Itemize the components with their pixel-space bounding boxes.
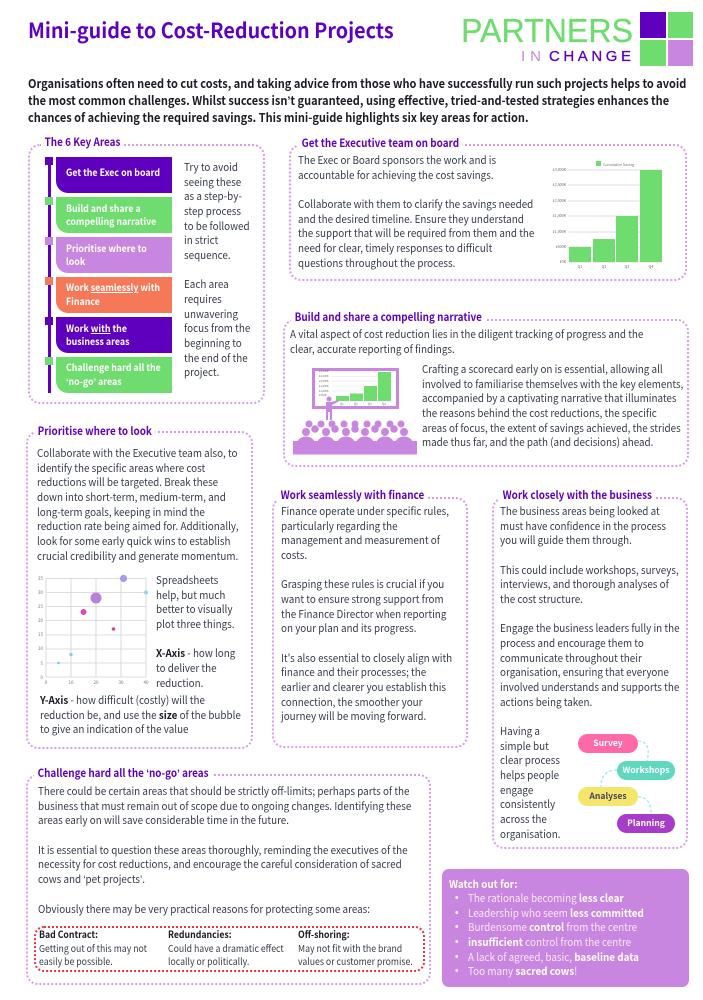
bubble chart: 20 xyxy=(38,618,43,624)
title: Mini-guide to Cost-Reduction Projects xyxy=(28,14,394,44)
bubble chart: 10 xyxy=(68,680,74,686)
text: business: process and encourage them to xyxy=(500,635,644,651)
step: challenge xyxy=(56,357,172,393)
bubble chart: 10 xyxy=(38,646,43,652)
logo: Partners in Change: PARTNERS xyxy=(461,12,633,49)
text: narrative body: involved to familiarise themselves with the key elements, xyxy=(422,376,683,392)
icon: presentation to audience: £2,500K xyxy=(319,374,329,378)
bar chart: cumulative saving: Cumulative Saving xyxy=(603,163,634,168)
marker 1 xyxy=(45,157,53,165)
text: narrative intro: clear, accurate reporting of findings. xyxy=(290,341,455,357)
text: executive team xyxy=(298,152,534,271)
text: process note: across the xyxy=(500,811,547,827)
heading: prioritise: Prioritise where to look xyxy=(38,423,152,439)
text: key areas note: unwavering xyxy=(184,306,238,322)
reason: redundancies: Could have a dramatic effect xyxy=(168,941,284,955)
step: challenge: ‘no-go’ areas xyxy=(66,374,122,388)
text: prioritise body: crucial credibility and generate momentum. xyxy=(37,548,238,564)
list: warnings: Leadership who seem less committed xyxy=(468,905,644,921)
text: business: the cost structure. xyxy=(500,591,583,607)
intro text xyxy=(28,74,686,126)
text: finance: It's also essential to closely align with xyxy=(281,650,452,666)
step: get the exec on board: Get the Exec on board xyxy=(66,165,160,179)
marker 6 xyxy=(45,357,53,365)
text: no-go body: necessity for cost reductions, and encourage the careful consideration of sacred xyxy=(38,856,402,872)
text: process note: organisation. xyxy=(500,826,561,842)
panel: watch out for xyxy=(442,869,689,987)
text: business: must have confidence in the process xyxy=(500,518,666,534)
intro text: chances of achieving the required savings. This mini-guide highlights six key areas for action. xyxy=(28,108,529,126)
reason: bad contract: easily be possible. xyxy=(39,954,113,968)
text: y-axis note: to give an indication of the value xyxy=(40,721,189,737)
text: narrative body: accompanied by a captivating narrative that illuminates xyxy=(422,390,677,406)
text: key areas note: seeing these xyxy=(184,174,241,190)
callout: practical reasons xyxy=(34,926,425,972)
heading: finance: Work seamlessly with finance xyxy=(281,487,424,503)
bar chart: cumulative saving xyxy=(553,161,662,270)
text: prioritise body: reduction rate being aimed for. Additionally, xyxy=(37,518,238,534)
bubble chart: 30 xyxy=(38,590,43,596)
text: process note: simple but xyxy=(500,738,549,754)
text: business: This could include workshops, surveys, xyxy=(500,562,679,578)
heading: the 6 key areas: The 6 Key Areas xyxy=(45,134,120,150)
text: business: Engage the business leaders fully in the xyxy=(500,620,680,636)
bubble chart: 15 xyxy=(38,632,43,638)
logo: Partners in Change: IN xyxy=(521,48,541,65)
step: prioritise xyxy=(56,237,172,273)
bubble chart: 5 xyxy=(40,661,44,667)
icon: presentation to audience: £500K xyxy=(319,393,327,397)
text: business: actions being taken. xyxy=(500,694,592,710)
bar chart: cumulative saving: £1,000K xyxy=(553,230,567,235)
step: analyses: Analyses xyxy=(589,790,627,802)
reason: redundancies xyxy=(168,927,284,968)
panel: compelling narrative xyxy=(283,319,689,467)
text: finance: journey will be moving forward. xyxy=(281,708,426,724)
step: get the exec on board xyxy=(56,157,172,193)
text: narrative body: the reasons behind the cost reductions, the specific xyxy=(422,405,657,421)
text: prioritise body: Collaborate with the Executive team also, to xyxy=(37,445,238,461)
text: process note: Having a xyxy=(500,723,540,739)
text: business xyxy=(500,503,680,710)
icon: presentation to audience: £1,000K xyxy=(319,389,329,393)
heading: executive team: Get the Executive team on board xyxy=(302,135,459,151)
text: narrative intro xyxy=(290,326,643,357)
text: process note: helps people xyxy=(500,767,559,783)
heading: business: Work closely with the business xyxy=(503,487,652,503)
text: prioritise body: down into short-term, medium-term, and xyxy=(37,489,226,505)
step: build narrative: Build and share a xyxy=(66,201,141,215)
bubble chart: 35 xyxy=(38,576,43,582)
reason: off-shoring xyxy=(298,927,413,968)
reason: off-shoring: values or customer promise. xyxy=(298,954,413,968)
logo: Partners in Change: CHANGE xyxy=(549,48,631,65)
text: narrative intro: A vital aspect of cost reduction lies in the diligent tracking of progress and the xyxy=(290,326,643,342)
heading: no-go areas: Challenge hard all the ‘no-go’ areas xyxy=(38,765,209,781)
text: executive team: accountable for achieving the cost savings. xyxy=(298,167,494,183)
text: executive team: and the desired timeline. Ensure they understand xyxy=(298,211,524,227)
bar chart: cumulative saving: £3,000K xyxy=(553,168,567,173)
text: finance: on your plan and its progress. xyxy=(281,620,416,636)
bar chart: cumulative saving: £1,500K xyxy=(553,214,567,219)
step: planning xyxy=(617,814,675,833)
step: survey xyxy=(578,734,638,753)
marker 5 xyxy=(45,317,53,325)
text: key areas note: the end of the xyxy=(184,350,248,366)
step: business: Work with the xyxy=(66,321,127,335)
heading: watch out for: Watch out for: xyxy=(449,876,517,892)
text: business: communicate throughout their xyxy=(500,650,642,666)
icon: presentation to audience: £1,500K xyxy=(319,384,329,388)
text: process note: clear process xyxy=(500,752,560,768)
step: prioritise: Prioritise where to xyxy=(66,241,147,255)
step: challenge: Challenge hard all the xyxy=(66,360,161,374)
icon: presentation to audience: Q1 xyxy=(340,402,344,406)
step: build narrative: compelling narrative xyxy=(66,214,156,228)
icon: presentation to audience: £2,000K xyxy=(319,379,329,383)
text: process note xyxy=(500,723,561,842)
text: business: involved understands and supports the xyxy=(500,679,679,695)
reason: off-shoring: May not fit with the brand xyxy=(298,941,402,955)
text: finance: finance and their processes; the xyxy=(281,664,426,680)
marker 3 xyxy=(45,237,53,245)
step: survey: Survey xyxy=(593,737,623,749)
text: process note: engage xyxy=(500,782,533,798)
intro text: the most common challenges. Whilst success isn’t guaranteed, using effective, tried-and-tested strategies enhances the xyxy=(28,91,669,109)
step: finance xyxy=(56,277,172,313)
text: key areas note xyxy=(184,159,250,380)
reason: bad contract: Bad Contract: xyxy=(39,927,98,941)
logo: Partners in Change xyxy=(461,12,693,66)
text: key areas note: step process xyxy=(184,203,241,219)
text: narrative body xyxy=(422,361,683,450)
icon: presentation to audience: Q3 xyxy=(368,402,372,406)
marker 4 xyxy=(45,277,53,285)
step: finance: Finance xyxy=(66,294,100,308)
reason: redundancies: Redundancies: xyxy=(168,927,232,941)
text: process note: consistently xyxy=(500,796,555,812)
text: no-go body: cows and ‘pet projects’. xyxy=(38,871,145,887)
bar chart: cumulative saving: £0K xyxy=(560,260,567,265)
text: no-go body: It is essential to question these areas thoroughly, reminding the executives of the xyxy=(38,842,408,858)
panel: finance xyxy=(272,497,468,748)
icon: presentation to audience: Q4 xyxy=(382,402,386,406)
reason: redundancies: locally or politically. xyxy=(168,954,249,968)
reason: bad contract xyxy=(39,927,147,968)
bullets: • xyxy=(455,951,459,963)
step: prioritise: look xyxy=(66,254,85,268)
list: warnings: Too many sacred cows! xyxy=(468,963,577,979)
step: workshops xyxy=(617,761,675,780)
text: finance xyxy=(280,503,452,724)
text: no-go body: Obviously there may be very practical reasons for protecting some areas: xyxy=(38,901,370,917)
text: key areas note: beginning to xyxy=(184,335,242,351)
text: y-axis note: Y-Axis - how difficult (costly) will the xyxy=(40,692,205,708)
text: chart note: to deliver the xyxy=(156,660,217,676)
text: key areas note: in strict xyxy=(184,232,218,248)
icon: presentation to audience: £3,000K xyxy=(319,369,329,373)
step: build narrative xyxy=(56,197,172,233)
text: key areas note: requires xyxy=(184,291,222,307)
text: executive team: questions throughout the process. xyxy=(298,255,455,271)
text: y-axis note xyxy=(40,692,241,737)
text: business: interviews, and thorough analyses of xyxy=(500,576,669,592)
step: business: business areas xyxy=(66,334,129,348)
text: executive team: The Exec or Board sponsors the work and is xyxy=(298,152,496,168)
text: prioritise body: long-term goals, keeping in mind the xyxy=(37,504,205,520)
marker 2 xyxy=(45,197,53,205)
bullets: • xyxy=(455,907,459,919)
text: y-axis note: reduction be, and use the size of the bubble xyxy=(40,707,241,723)
text: key areas note: Try to avoid xyxy=(184,159,238,175)
text: key areas note: project. xyxy=(184,364,219,380)
icon: presentation to audience xyxy=(293,368,417,454)
panel: no-go areas xyxy=(26,774,431,985)
panel: prioritise xyxy=(26,431,253,749)
bullets: • xyxy=(455,892,459,904)
text: prioritise body: identify the specific areas where cost xyxy=(37,460,205,476)
list: warnings: Burdensome control from the centre xyxy=(468,919,637,935)
bar chart: cumulative saving: Q3 xyxy=(625,265,629,270)
text: key areas note: Each area xyxy=(184,276,229,292)
list: warnings: insufficient control from the centre xyxy=(468,934,631,950)
text: prioritise body: reductions will be targeted. Break these xyxy=(37,474,218,490)
icon: presentation to audience: Q2 xyxy=(354,402,358,406)
panel: executive team xyxy=(289,144,687,281)
text: prioritise body: look for some early quick wins to establish xyxy=(37,533,230,549)
text: narrative body: areas of focus, the extent of savings achieved, the strides xyxy=(422,420,681,436)
step: planning: Planning xyxy=(627,817,665,829)
bubble chart: 40 xyxy=(144,680,149,686)
bubble chart: 30 xyxy=(118,680,124,686)
bullets: • xyxy=(455,936,459,948)
text: key areas note: focus from the xyxy=(184,320,250,336)
text: executive team: Collaborate with them to clarify the savings needed xyxy=(298,196,533,212)
bar chart: cumulative saving: £500K xyxy=(556,245,567,250)
process connectors xyxy=(600,740,652,812)
bullets xyxy=(455,892,459,977)
text: finance: Finance operate under specific rules, xyxy=(281,503,449,519)
bubble chart xyxy=(38,574,149,686)
text: no-go body: areas early on will save considerable time in the future. xyxy=(38,812,289,828)
text: finance: want to ensure strong support from xyxy=(281,591,444,607)
text: finance: management and measurement of xyxy=(281,532,440,548)
text: finance: earlier and clearer you establish this xyxy=(281,679,446,695)
list: warnings: A lack of agreed, basic, baseline data xyxy=(468,949,639,965)
list: warnings xyxy=(468,890,644,979)
bubble chart: 0 xyxy=(45,680,48,686)
bar chart: cumulative saving: £2,000K xyxy=(553,199,567,204)
text: narrative body: Crafting a scorecard early on is essential, allowing all xyxy=(422,361,663,377)
reason: off-shoring: Off-shoring: xyxy=(298,927,350,941)
text: finance: particularly regarding the xyxy=(281,518,398,534)
bullets: • xyxy=(455,965,459,977)
text: business: The business areas being looked at xyxy=(500,503,660,519)
text: no-go body: There could be certain areas that should be strictly off-limits; perhaps parts of the xyxy=(38,783,410,799)
text: chart note: X-Axis - how long xyxy=(156,645,235,661)
text: finance: Grasping these rules is crucial if you xyxy=(281,576,444,592)
text: executive team: the support that will be required from them and the xyxy=(298,225,534,241)
bubble chart: 0 xyxy=(40,675,44,681)
text: chart note: reduction. xyxy=(156,675,203,691)
step: workshops: Workshops xyxy=(622,764,670,776)
panel: the 6 key areas xyxy=(28,144,265,404)
text: business: organisation, ensuring that everyone xyxy=(500,664,669,680)
list: warnings: The rationale becoming less clear xyxy=(468,890,624,906)
text: no-go body xyxy=(38,783,411,917)
text: chart note: help, but much xyxy=(156,587,225,603)
text: key areas note: as a step-by- xyxy=(184,188,242,204)
bubble chart: 20 xyxy=(94,680,99,686)
text: narrative body: made thus far, and the path (and decisions) ahead. xyxy=(422,434,653,450)
text: chart note: better to visually xyxy=(156,601,232,617)
bubble chart: 25 xyxy=(38,604,43,610)
bullets: • xyxy=(455,921,459,933)
text: key areas note: to be followed xyxy=(184,218,250,234)
text: prioritise body xyxy=(37,445,238,564)
text: finance: costs. xyxy=(281,547,307,563)
reason: bad contract: Getting out of this may not xyxy=(39,941,147,955)
text: chart note: plot three things. xyxy=(156,616,235,632)
bar chart: cumulative saving: £2,500K xyxy=(553,183,567,188)
bar chart: cumulative saving: Q4 xyxy=(649,265,653,270)
text: executive team: need for clear, timely responses to difficult xyxy=(298,240,492,256)
step: business xyxy=(56,317,172,353)
text: finance: connection, the smoother your xyxy=(281,694,422,710)
timeline line xyxy=(48,157,50,393)
text: no-go body: business that must remain out of scope due to ongoing changes. Identifying these xyxy=(38,798,411,814)
text: chart note: Spreadsheets xyxy=(156,572,218,588)
step: analyses xyxy=(578,787,638,806)
text: finance: the Finance Director when reporting xyxy=(281,606,446,622)
text: business: you will guide them through. xyxy=(500,532,632,548)
text: key areas note: sequence. xyxy=(184,247,231,263)
intro text: Organisations often need to cut costs, and taking advice from those who have successfully run such projects helps to avoid xyxy=(28,74,686,92)
panel: business xyxy=(492,497,688,849)
bar chart: cumulative saving: Q1 xyxy=(578,265,582,270)
heading: compelling narrative: Build and share a compelling narrative xyxy=(295,309,482,325)
bar chart: cumulative saving: Q2 xyxy=(602,265,606,270)
step: finance: Work seamlessly with xyxy=(66,280,160,294)
text: chart note xyxy=(156,572,236,691)
